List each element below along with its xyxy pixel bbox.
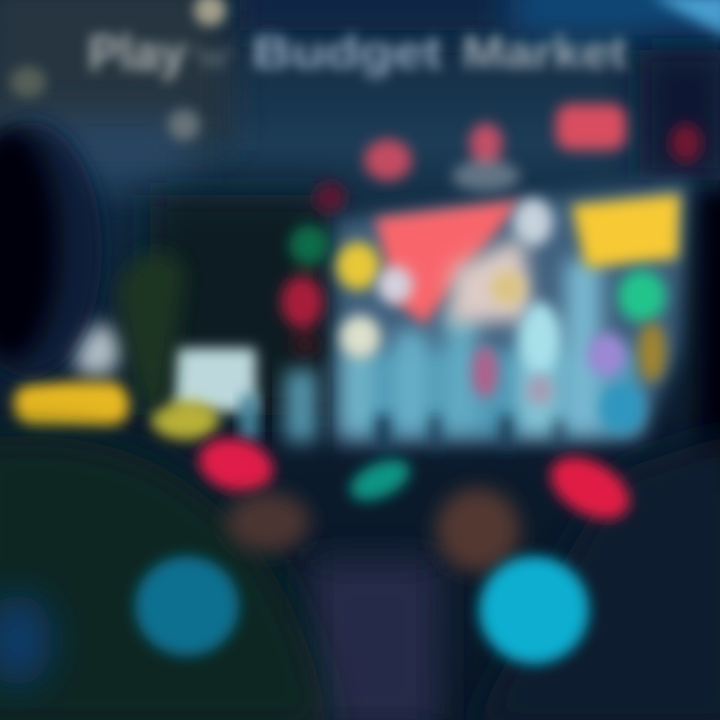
amber block	[638, 322, 666, 382]
white shape	[70, 323, 122, 377]
mauve block	[526, 375, 554, 405]
white dot	[377, 266, 413, 304]
pink bar	[472, 346, 498, 398]
gold dot	[491, 271, 525, 305]
yellow panel	[572, 194, 680, 268]
green circle	[618, 270, 666, 322]
title: 'n'	[192, 42, 234, 75]
title	[88, 25, 627, 81]
foreground silhouette left	[0, 122, 330, 720]
title: Market	[462, 26, 627, 78]
light card	[174, 348, 256, 412]
blue block	[600, 384, 644, 432]
floating red tags	[314, 104, 702, 214]
ceiling lights	[10, 0, 226, 141]
bar chart columns	[340, 260, 640, 435]
light highlight	[513, 198, 553, 246]
hands	[226, 488, 520, 572]
foreground silhouette right	[470, 190, 720, 720]
dark bar gaps	[376, 415, 563, 451]
screen base	[335, 182, 690, 445]
red wedge chart	[375, 200, 522, 325]
left indicator dots	[281, 225, 329, 357]
plant	[115, 252, 185, 405]
pale blue highlight	[521, 302, 559, 374]
title: Play	[88, 25, 186, 81]
dashboard screen	[335, 182, 690, 451]
purple block	[587, 333, 627, 377]
pale pie area	[448, 235, 532, 325]
title: Budget	[252, 26, 442, 78]
yellow green card	[151, 400, 219, 440]
yellow bar	[14, 382, 130, 426]
red ovals and teal leaf	[193, 430, 640, 532]
cream dot	[339, 315, 381, 359]
small bars	[285, 370, 317, 442]
left secondary panel	[14, 323, 317, 442]
blue circles	[135, 556, 589, 664]
yellow dot	[336, 242, 380, 290]
